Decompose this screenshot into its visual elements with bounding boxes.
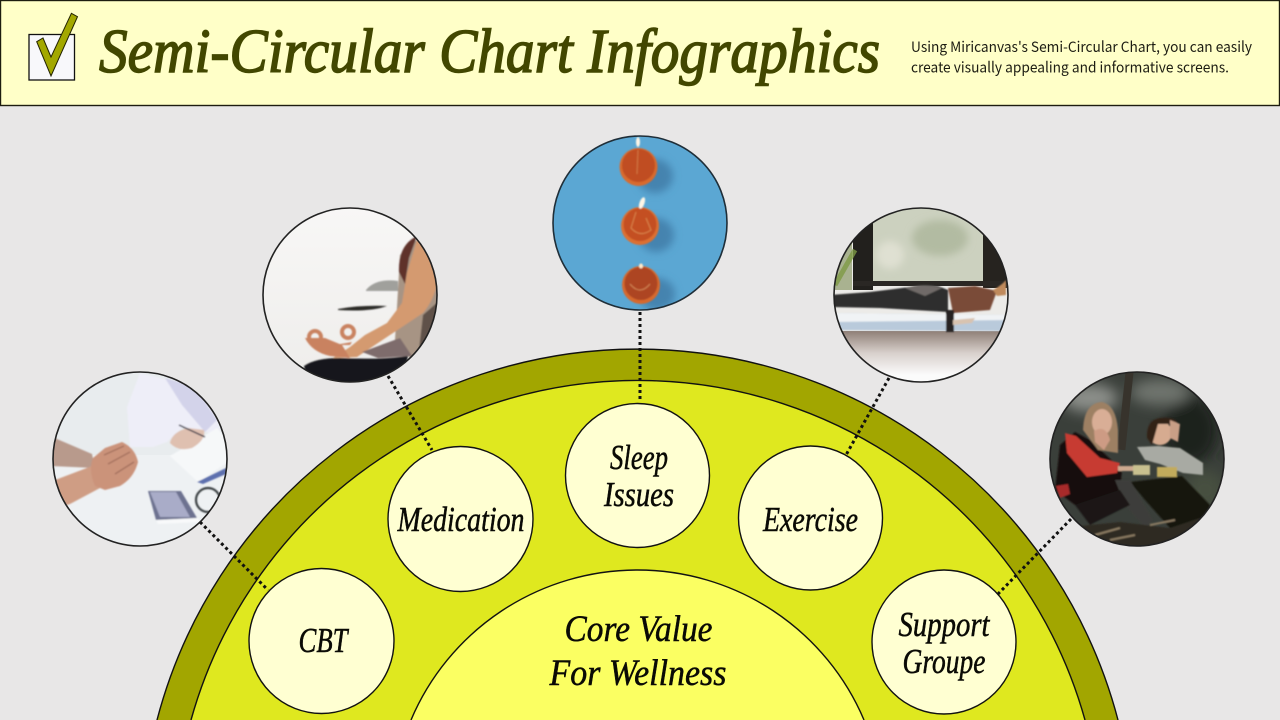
header banner (0, 0, 1280, 106)
icon: checkbox with check mark (29, 13, 78, 80)
node: Medication: Medication (397, 500, 524, 539)
title: Semi-Circular Chart Infographics (99, 18, 880, 86)
node: Support Groupe: Support (898, 605, 991, 644)
semi-circular chart: outer ring (157, 349, 1118, 720)
node: CBT: CBT (298, 621, 349, 660)
photo: meditation by water (260, 205, 440, 385)
semi-circular chart: core (411, 570, 864, 720)
connector lines (200, 312, 1071, 594)
node: Exercise: Exercise (762, 500, 858, 539)
node: Exercise (738, 446, 882, 590)
subtitle (911, 36, 1252, 78)
photo: clay lamps on blue (550, 133, 730, 313)
node: Support Groupe: Groupe (902, 642, 986, 681)
core label: For Wellness (549, 653, 726, 694)
photo: two friends laughing (1049, 371, 1225, 547)
core label: Core Value (564, 609, 712, 650)
subtitle: Using Miricanvas's Semi-Circular Chart, you can easily (911, 36, 1252, 57)
node: Sleep Issues: Sleep (610, 438, 668, 477)
node: Support Groupe (872, 570, 1016, 714)
node: CBT (249, 568, 394, 714)
node: Sleep Issues (566, 404, 710, 548)
node: Medication (388, 446, 533, 592)
node: Sleep Issues: Issues (603, 475, 674, 514)
photo: plank exercise (830, 205, 1015, 386)
core label (549, 609, 726, 694)
semi-circular chart: middle ring (191, 380, 1085, 720)
subtitle: create visually appealing and informative screens. (911, 56, 1229, 78)
photo: consultation at desk (50, 370, 230, 550)
